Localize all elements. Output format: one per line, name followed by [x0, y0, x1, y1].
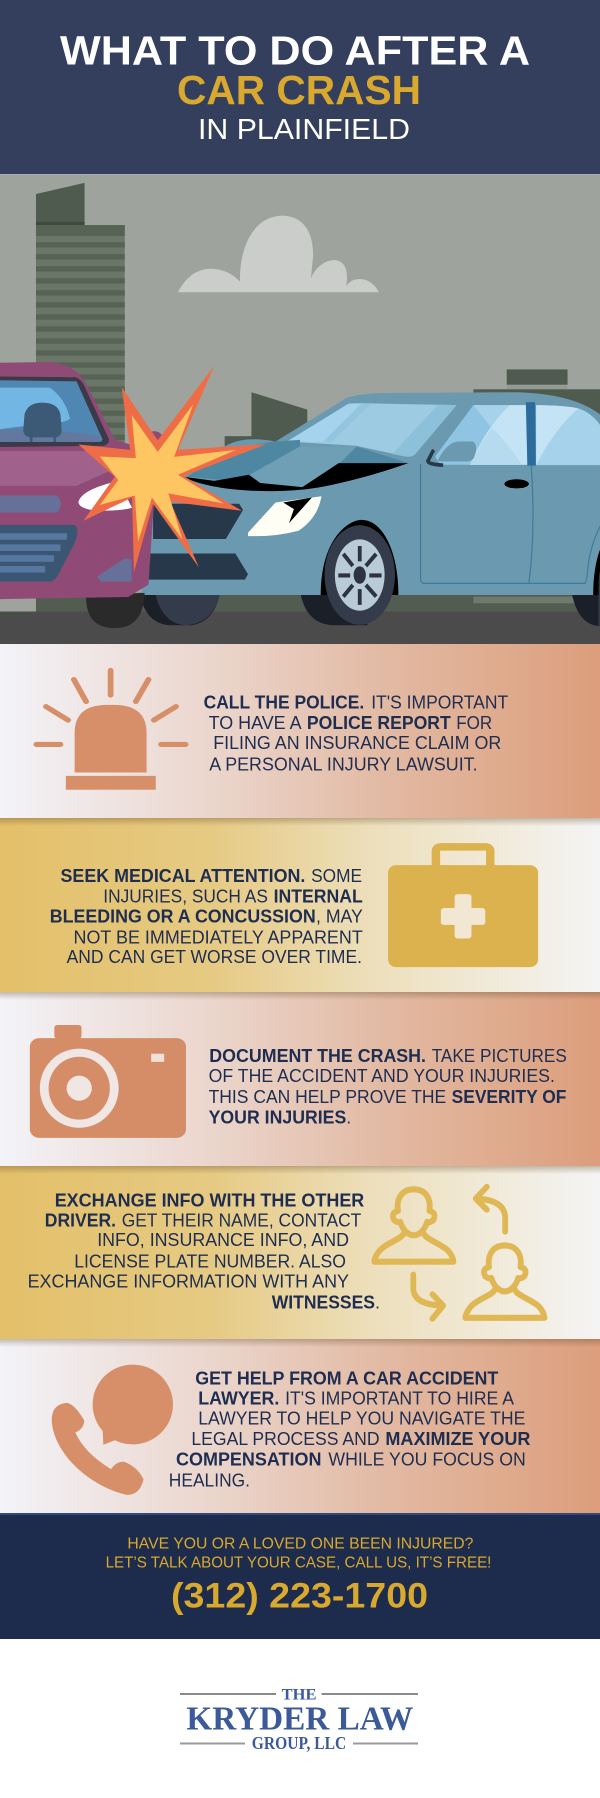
medical text: AND CAN GET WORSE OVER TIME.	[67, 947, 362, 967]
exchange text	[28, 1190, 380, 1312]
medical text: BLEEDING OR A CONCUSSION	[50, 906, 316, 926]
police text: IT'S IMPORTANT	[371, 693, 508, 713]
icon: siren	[36, 670, 186, 790]
icon: two people exchanging	[374, 1187, 545, 1319]
police text: TO HAVE A	[209, 713, 302, 733]
purple car	[0, 362, 163, 628]
police text: POLICE REPORT	[307, 713, 451, 733]
medical text: INTERNAL	[274, 886, 363, 906]
call to action text	[106, 1536, 491, 1572]
panel: get help from a lawyer	[0, 1339, 600, 1513]
document text: SEVERITY OF	[452, 1087, 566, 1107]
crash illustration	[0, 174, 600, 647]
logo: THE	[282, 1686, 316, 1704]
panel: exchange info	[0, 1166, 600, 1339]
call to action text: HAVE YOU OR A LOVED ONE BEEN INJURED?	[127, 1536, 473, 1552]
medical text: INJURIES, SUCH AS	[103, 886, 268, 906]
document text: DOCUMENT THE CRASH.	[209, 1046, 426, 1066]
background buildings	[225, 369, 600, 601]
ground and road	[0, 593, 600, 647]
exchange text: .	[375, 1292, 380, 1312]
lawyer text: GET HELP FROM A CAR ACCIDENT	[195, 1369, 498, 1389]
exchange text: EXCHANGE INFORMATION WITH ANY	[28, 1271, 349, 1291]
icon: first aid kit	[388, 847, 538, 967]
logo: GROUP, LLC	[252, 1733, 346, 1753]
lawyer text: COMPENSATION	[176, 1450, 322, 1470]
document text: .	[346, 1107, 351, 1127]
cloud	[178, 216, 379, 292]
lawyer text: LEGAL PROCESS AND	[191, 1429, 380, 1449]
lawyer text: HEALING.	[169, 1470, 250, 1490]
panel: document the crash	[0, 992, 600, 1166]
exchange text: DRIVER.	[45, 1210, 116, 1230]
document text: THIS CAN HELP PROVE THE	[209, 1087, 446, 1107]
police text: FOR	[456, 713, 492, 733]
exchange text: EXCHANGE INFO WITH THE OTHER	[55, 1190, 364, 1210]
explosion star	[78, 366, 267, 572]
lawyer text	[169, 1369, 530, 1490]
title line 3: IN PLAINFIELD	[198, 114, 410, 146]
medical text: NOT BE IMMEDIATELY APPARENT	[74, 927, 363, 947]
tall building	[36, 183, 125, 445]
exchange text: INFO, INSURANCE INFO, AND	[97, 1230, 349, 1250]
phone number: (312) 223-1700	[171, 1576, 428, 1616]
document text: OF THE ACCIDENT AND YOUR INJURIES.	[209, 1066, 555, 1086]
police text	[204, 693, 508, 774]
lawyer text: IT'S IMPORTANT TO HIRE A	[285, 1388, 514, 1408]
exchange text: WITNESSES	[272, 1292, 375, 1312]
lawyer text: LAWYER.	[198, 1388, 279, 1408]
front wheel	[321, 520, 398, 625]
panel: seek medical attention	[0, 818, 600, 992]
rear wheel	[593, 549, 600, 626]
call to action panel	[0, 1513, 600, 1639]
document text: YOUR INJURIES	[209, 1107, 346, 1127]
logo: KRYDER LAW	[186, 1701, 413, 1738]
blue car	[140, 392, 600, 626]
lawyer text: WHILE YOU FOCUS ON	[328, 1450, 526, 1470]
police text: FILING AN INSURANCE CLAIM OR	[213, 733, 501, 753]
title line 2: CAR CRASH	[177, 67, 421, 113]
medical text	[50, 866, 363, 967]
medical text: SOME	[311, 866, 362, 886]
medical text: , MAY	[316, 906, 363, 926]
header panel	[0, 0, 600, 174]
police text: A PERSONAL INJURY LAWSUIT.	[209, 754, 478, 774]
call to action text: LET’S TALK ABOUT YOUR CASE, CALL US, IT’S FREE!	[106, 1555, 491, 1572]
police text: CALL THE POLICE.	[204, 693, 364, 713]
document text: TAKE PICTURES	[432, 1046, 567, 1066]
medical text: SEEK MEDICAL ATTENTION.	[60, 866, 305, 886]
lawyer text: LAWYER TO HELP YOU NAVIGATE THE	[198, 1408, 525, 1428]
exchange text: GET THEIR NAME, CONTACT	[122, 1210, 361, 1230]
logo	[180, 1686, 418, 1753]
panel: call the police	[0, 644, 600, 818]
icon: camera	[30, 1025, 186, 1138]
document text	[209, 1046, 567, 1127]
icon: phone and speech bubble	[52, 1365, 173, 1495]
exchange text: LICENSE PLATE NUMBER. ALSO	[74, 1251, 346, 1271]
title line 1: WHAT TO DO AFTER A	[60, 28, 530, 74]
lawyer text: MAXIMIZE YOUR	[385, 1429, 530, 1449]
